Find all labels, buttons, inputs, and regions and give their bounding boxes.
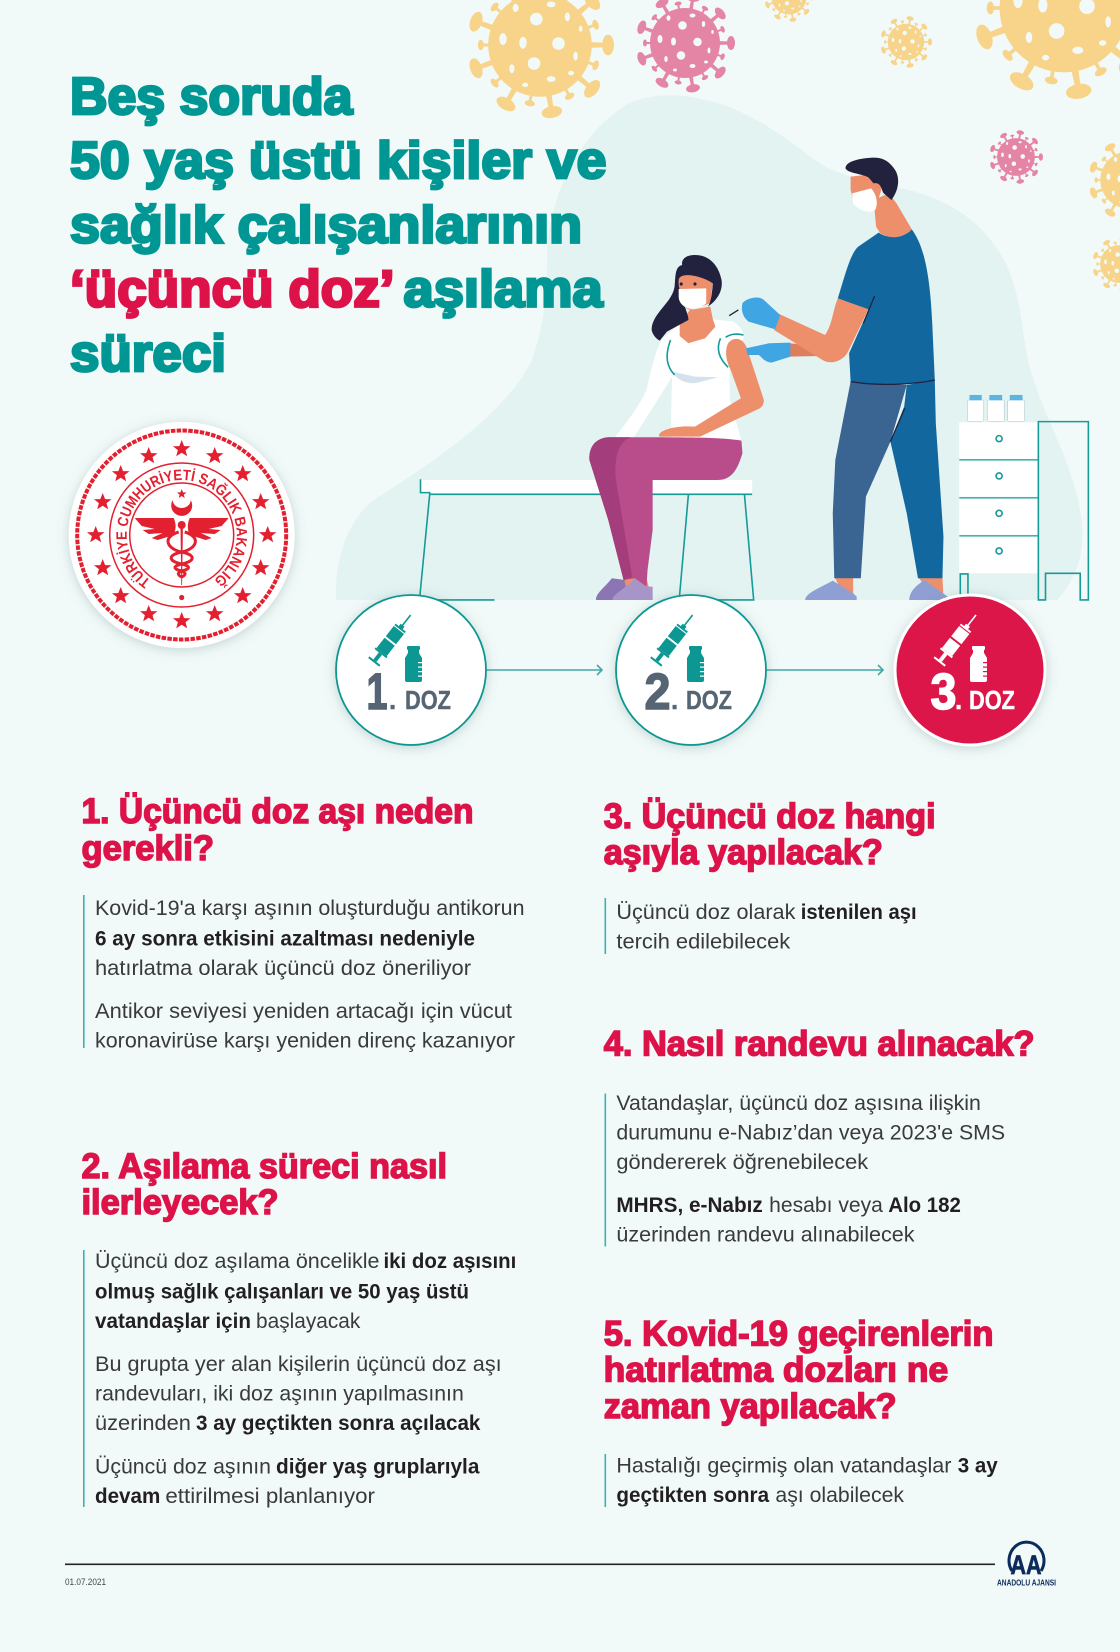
label [930, 663, 1015, 720]
virus: small pink [989, 130, 1043, 184]
section 3 [604, 797, 936, 954]
dose arrows [486, 665, 883, 675]
text block: Vatandaşlar, üçüncü doz aşısına ilişkin [616, 1092, 981, 1115]
text block: başlayacak [256, 1310, 361, 1333]
label: 2 [644, 663, 670, 720]
text block [604, 1092, 1005, 1246]
text block: Üçüncü doz olarak [616, 901, 796, 924]
icon: syringe [650, 610, 699, 667]
man nurse [729, 158, 948, 600]
virus: small yellow [880, 16, 932, 68]
circle [616, 595, 766, 745]
text block: Hastalığı geçirmiş olan vatandaşlar [616, 1454, 951, 1478]
label: . [955, 685, 962, 715]
crescent and star emblem [171, 489, 192, 516]
date: 01.07.2021 [65, 1577, 106, 1587]
bottom dot [179, 595, 184, 600]
text block: Antikor seviyesi yeniden artacağı için vücut [95, 1000, 512, 1023]
text block [604, 1454, 998, 1507]
virus: big yellow corner [973, 0, 1120, 101]
text block: üzerinden [95, 1412, 191, 1435]
text block: randevuları, iki doz aşının yapılmasının [95, 1382, 464, 1406]
title: aşılama [404, 261, 604, 319]
text block: iki doz aşısını [384, 1250, 516, 1273]
text block: devam [95, 1485, 160, 1508]
icon: vial [687, 646, 704, 682]
label: 1 [366, 663, 388, 720]
circle [336, 595, 486, 745]
stars ring [87, 440, 276, 628]
heading: 3. Üçüncü doz hangi [604, 797, 936, 836]
text block: 3 ay [958, 1454, 998, 1478]
text block: tercih edilebilecek [616, 930, 791, 954]
text block: Üçüncü doz aşının [95, 1456, 271, 1478]
virus: small yellow top [764, 0, 814, 22]
title [70, 68, 606, 383]
virus: yellow right edge [1089, 139, 1120, 221]
dose 2 badge [616, 595, 766, 745]
label: DOZ [405, 685, 451, 715]
heading [82, 792, 474, 868]
logo: Anadolu Ajansi: ANADOLU AJANSI [997, 1578, 1056, 1588]
heading: zaman yapılacak? [604, 1387, 897, 1426]
heading [604, 797, 936, 872]
text block: hatırlatma olarak üçüncü doz öneriliyor [95, 957, 471, 980]
icon: syringe [933, 610, 982, 667]
caduceus wings and snakes [135, 518, 229, 585]
text block: hesabı veya [769, 1194, 883, 1217]
inner rings [110, 463, 254, 607]
decorative viruses [467, 0, 1120, 291]
ministry of health seal [64, 418, 300, 656]
title: ‘üçüncü doz’ [70, 261, 394, 319]
text block: MHRS, e-Nabız [616, 1194, 763, 1217]
heading: 4. Nasıl randevu alınacak? [604, 1025, 1035, 1064]
text block [83, 1250, 516, 1508]
text block: Kovid-19'a karşı aşının oluşturduğu antikorun [95, 897, 524, 920]
logo: Anadolu Ajansi [997, 1542, 1056, 1588]
background blob [336, 95, 1083, 600]
label: DOZ [686, 685, 732, 715]
icon: vial [970, 646, 987, 682]
heading: ilerleyecek? [82, 1183, 278, 1222]
text block: 6 ay sonra etkisini azaltması nedeniyle [95, 928, 475, 950]
section 2 [82, 1147, 516, 1508]
cabinet with bottles [959, 395, 1088, 600]
section 5 [604, 1314, 998, 1507]
text block: aşı olabilecek [775, 1484, 904, 1507]
title: Beş soruda [70, 68, 354, 126]
bench [419, 479, 754, 600]
rope ring [77, 430, 286, 640]
heading [82, 1147, 447, 1222]
arrow: dose 2 to dose 3 [766, 665, 883, 675]
circle [895, 595, 1045, 745]
text block: istenilen aşı [801, 901, 917, 924]
label: DOZ [969, 685, 1015, 715]
logo: Anadolu Ajansi: AA [1010, 1550, 1042, 1580]
footer rule [65, 1564, 995, 1565]
vaccination illustration [336, 95, 1088, 600]
heading: hatırlatma dozları ne [604, 1350, 948, 1389]
footer [65, 1542, 1056, 1588]
text block: Alo 182 [888, 1194, 961, 1217]
heading: aşıyla yapılacak? [604, 833, 883, 872]
dose 1 badge [336, 595, 486, 745]
text block: üzerinden randevu alınabilecek [616, 1224, 915, 1246]
dose 3 badge [895, 595, 1045, 745]
heading: 2. Aşılama süreci nasıl [82, 1147, 447, 1186]
label: . [389, 685, 396, 715]
text block: 3 ay geçtikten sonra açılacak [196, 1412, 481, 1435]
text block: vatandaşlar için [95, 1310, 251, 1333]
virus: small yellow right edge [1092, 237, 1120, 291]
circular ministry name: TÜRKİYE CUMHURİYETİ SAĞLIK BAKANLIĞI [116, 468, 247, 589]
icon: syringe [368, 610, 417, 667]
label [366, 663, 451, 720]
icon: vial [405, 646, 422, 682]
text block: Üçüncü doz aşılama öncelikle [95, 1250, 379, 1273]
label [644, 663, 732, 720]
woman patient [589, 255, 764, 600]
title: sağlık çalışanlarının [70, 196, 582, 254]
text block: göndererek öğrenebilecek [616, 1151, 869, 1174]
virus: large yellow [467, 0, 614, 120]
text block [83, 895, 524, 1052]
label: 3 [930, 663, 956, 720]
heading: gerekli? [82, 829, 214, 868]
text block: olmuş sağlık çalışanları ve 50 yaş üstü [95, 1280, 469, 1304]
text block: durumunu e-Nabız’dan veya 2023'e SMS [616, 1122, 1005, 1144]
heading [604, 1314, 994, 1426]
arrow: dose 1 to dose 2 [486, 665, 602, 675]
section 1 [82, 792, 524, 1052]
title: süreci [70, 325, 226, 383]
text block: geçtikten sonra [616, 1484, 769, 1507]
virus: pink [636, 0, 735, 93]
text block: diğer yaş gruplarıyla [276, 1456, 480, 1478]
section 4 [604, 1025, 1035, 1246]
title: 50 yaş üstü kişiler ve [70, 132, 606, 190]
text block: koronavirüse karşı yeniden direnç kazanıyor [95, 1030, 515, 1052]
heading: 1. Üçüncü doz aşı neden [82, 792, 474, 831]
label: . [671, 685, 678, 715]
text block: Bu grupta yer alan kişilerin üçüncü doz aşı [95, 1353, 502, 1376]
seal disc [69, 422, 295, 648]
text block: ettirilmesi planlanıyor [165, 1485, 375, 1508]
heading: 5. Kovid-19 geçirenlerin [604, 1314, 994, 1353]
text block [604, 898, 917, 954]
